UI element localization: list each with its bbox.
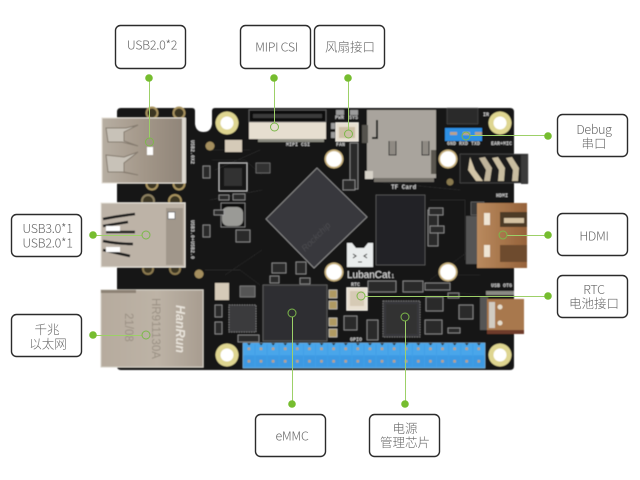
HDMI port bbox=[466, 202, 527, 268]
fan connector bbox=[331, 110, 358, 141]
board silkscreen labels: FAN bbox=[336, 142, 345, 148]
board silkscreen labels: USB OTG bbox=[491, 283, 512, 289]
callout: power management chip: 管理芯片 bbox=[380, 432, 430, 451]
callout: Debug serial bbox=[462, 114, 628, 156]
callout: eMMC bbox=[256, 309, 326, 456]
Ethernet brand text: HanRun bbox=[173, 305, 187, 353]
RAM chip bbox=[376, 195, 425, 265]
callout: power management chip bbox=[370, 313, 440, 456]
callout: gigabit ethernet: 以太网 bbox=[29, 334, 67, 352]
callout: gigabit ethernet: 千兆 bbox=[34, 319, 60, 338]
USB3.0 and USB2.0 port bbox=[101, 195, 185, 274]
TF card slot bbox=[362, 110, 436, 182]
callout: HDMI bbox=[499, 214, 628, 256]
USB2.0 double port bbox=[102, 108, 186, 190]
board silkscreen labels: USB2.0X2 bbox=[189, 140, 195, 164]
gold header pads bbox=[329, 290, 337, 337]
callout: MIPI CSI: MIPI CSI bbox=[255, 36, 298, 56]
callout: gigabit ethernet bbox=[12, 314, 150, 356]
board silkscreen labels: GPIO bbox=[350, 337, 362, 343]
Ethernet date text: 21/08 bbox=[122, 313, 134, 342]
callout: USB3.0 and USB2.0 bbox=[12, 214, 150, 256]
power management chip bbox=[383, 301, 420, 337]
small network chip bbox=[229, 305, 256, 332]
small passives bbox=[203, 143, 473, 342]
callout: eMMC: eMMC bbox=[275, 426, 309, 444]
callout: fan connector bbox=[314, 26, 384, 138]
board silkscreen labels: HDMI bbox=[496, 193, 508, 199]
callout: Debug serial: 串口 bbox=[581, 133, 607, 152]
Ethernet port bbox=[101, 290, 203, 367]
audio jack bbox=[460, 154, 528, 184]
Debug pin header bbox=[445, 128, 482, 141]
callout: RTC battery: RTC bbox=[583, 279, 605, 298]
board silkscreen labels: SYS bbox=[349, 115, 358, 121]
Ethernet model text: HR911130A bbox=[149, 298, 161, 359]
circuit board bbox=[117, 108, 514, 370]
eMMC chip bbox=[263, 285, 327, 341]
board silkscreen labels: GND RXD TXD bbox=[447, 141, 480, 147]
callout: HDMI: HDMI bbox=[579, 226, 609, 244]
RTC battery connector bbox=[347, 288, 367, 310]
board silkscreen labels: PWR bbox=[335, 115, 344, 121]
crystal components bbox=[215, 140, 270, 300]
MIPI CSI connector bbox=[249, 110, 326, 142]
processor chip bbox=[266, 168, 367, 268]
callout: RTC battery bbox=[357, 276, 628, 318]
inductor bbox=[221, 203, 245, 227]
callout: USB3.0 and USB2.0: USB3.0*1 bbox=[22, 218, 73, 237]
callout: RTC battery: 电池接口 bbox=[569, 293, 619, 312]
board silkscreen labels: USB3.0+USB2.0 bbox=[189, 220, 195, 259]
GPIO pin header bbox=[243, 343, 485, 368]
callout: Debug serial: Debug bbox=[576, 119, 612, 138]
LubanCat brand: LubanCat1 bbox=[347, 270, 394, 281]
callout: power management chip: 电源 bbox=[392, 418, 418, 437]
board silkscreen labels: TF Card bbox=[391, 184, 417, 191]
callout: USB2.0*2 bbox=[116, 26, 186, 146]
callout: MIPI CSI bbox=[240, 26, 310, 131]
photo of the board bbox=[101, 108, 528, 370]
board silkscreen labels: EAR+MIC bbox=[491, 141, 512, 147]
USB OTG port bbox=[480, 291, 524, 334]
small chip with white frame bbox=[219, 163, 247, 191]
board silkscreen labels: MIPI CSI bbox=[286, 142, 310, 148]
mounting holes bbox=[194, 112, 512, 366]
callout: USB3.0 and USB2.0: USB2.0*1 bbox=[22, 232, 73, 252]
board silkscreen labels: RTC bbox=[351, 282, 360, 288]
board silkscreen labels: IR bbox=[483, 112, 489, 118]
callout: fan connector: 风扇接口 bbox=[325, 36, 375, 56]
board silkscreen labels bbox=[189, 112, 512, 343]
processor chip: Rockchip bbox=[299, 220, 333, 253]
IR header bbox=[447, 108, 478, 124]
cat logo bbox=[347, 243, 373, 267]
callout: USB2.0*2: USB2.0*2 bbox=[127, 34, 178, 54]
